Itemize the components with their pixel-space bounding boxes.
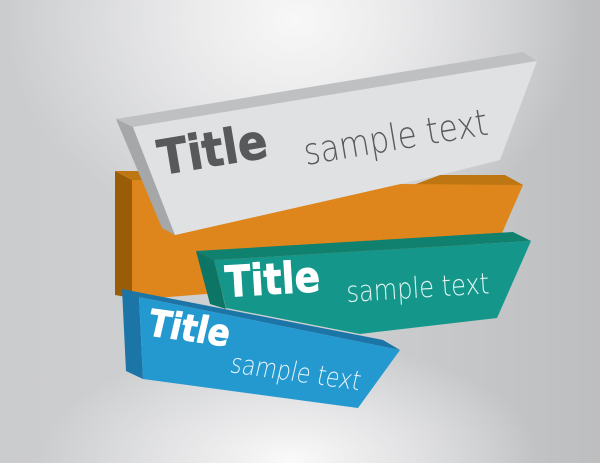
text: blue sample: sample text bbox=[227, 349, 364, 397]
panel: blue bbox=[122, 289, 400, 408]
panel: grey bbox=[116, 52, 537, 235]
text: teal sample: sample text bbox=[345, 266, 490, 309]
text: grey sample: sample text bbox=[300, 101, 491, 174]
panel: teal bbox=[196, 232, 531, 334]
heading: grey title: Title bbox=[154, 113, 271, 187]
panel: orange bbox=[115, 171, 523, 300]
heading: blue title: Title bbox=[144, 302, 235, 355]
heading: teal title: Title bbox=[224, 252, 321, 308]
